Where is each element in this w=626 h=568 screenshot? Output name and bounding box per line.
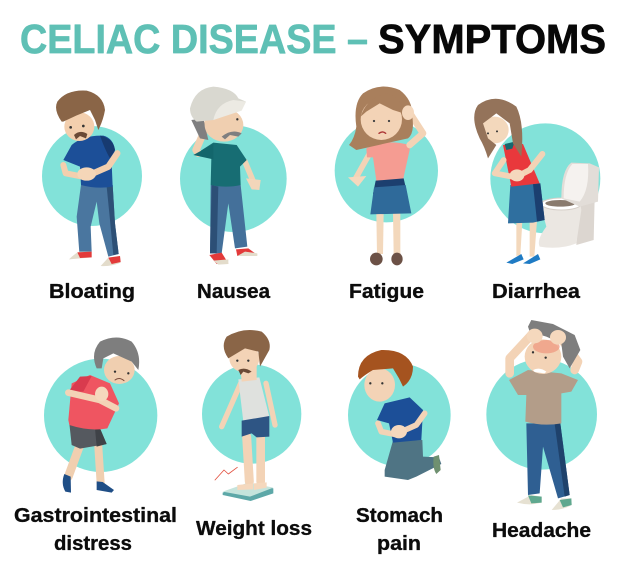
label: stomach pain [356,504,443,555]
label: bloating: Bloating [49,280,135,303]
illustration: tired woman [335,87,438,265]
label: gastrointestinal distress [14,504,177,555]
label: diarrhea: Diarrhea [492,280,581,303]
panel: nausea [180,87,287,303]
illustration: thin man on scale [202,330,301,501]
illustration: man holding belly [42,91,142,266]
panel: bloating [42,91,142,303]
title [20,16,606,62]
illustration: hunched man holding chest [44,337,157,493]
label: weight loss: Weight loss [196,517,312,540]
label: nausea: Nausea [197,280,271,303]
panel: headache [486,320,597,542]
title: CELIAC DISEASE – [20,16,368,62]
title: SYMPTOMS [378,16,606,62]
illustration: kneeling boy holding stomach [348,350,451,480]
panel: diarrhea [474,99,600,303]
panel: stomach pain [348,350,451,555]
illustration: man in cap holding forehead [180,87,287,265]
panel: gastrointestinal distress [14,337,177,555]
label: stomach pain: pain [377,532,421,555]
label: stomach pain: Stomach [356,504,443,527]
panel: weight loss [196,330,312,540]
panel: fatigue [335,87,438,303]
label: fatigue: Fatigue [349,280,424,303]
label: headache: Headache [492,519,591,542]
label: gastrointestinal distress: Gastrointestinal [14,504,177,527]
illustration: woman bent beside toilet [474,99,600,264]
illustration: man holding head [486,320,597,510]
label: gastrointestinal distress: distress [54,532,132,555]
